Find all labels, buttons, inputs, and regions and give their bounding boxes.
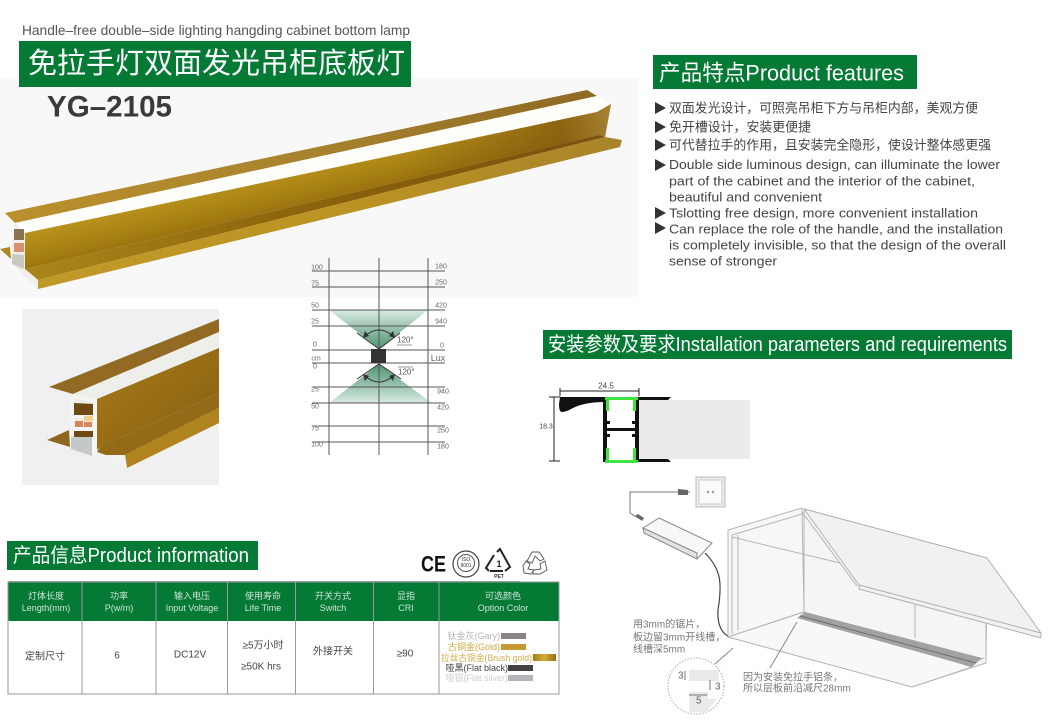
detail circle: 3 (715, 682, 721, 692)
end section (70, 394, 97, 458)
right scale: 420 (437, 404, 449, 412)
diffuser (73, 332, 219, 399)
right scale: 940 (437, 388, 449, 396)
text block: features list: 可代替拉手的作用，且安装完全隐形，使设计整体感更强 (669, 138, 991, 152)
left scale: 50 (311, 404, 319, 410)
color options: 哑银(Flat silver) (446, 672, 508, 683)
lamp end section (0, 223, 38, 289)
color options: 古铜金(Gold) (448, 641, 500, 652)
column headers: 输入电压 (174, 590, 210, 601)
left scale: 25 (311, 386, 319, 394)
lamp main face (25, 104, 611, 269)
dimension labels: 24.5 (598, 382, 614, 390)
lamp lower tray (25, 135, 605, 280)
column headers: 可选颜色 (485, 590, 521, 601)
column headers: Input Voltage (166, 603, 218, 613)
bullets (655, 102, 666, 234)
table header background (8, 582, 559, 621)
table values: ≥5万小时 (242, 640, 284, 652)
title banner (19, 41, 411, 87)
column headers: CRI (398, 603, 414, 613)
left scale (311, 264, 323, 448)
right scale: Lux (431, 353, 446, 363)
column headers: Life Time (245, 603, 281, 613)
text block: features list: 免开槽设计，安装更便捷 (669, 120, 811, 134)
note: saw blade slot: 线槽深5mm (633, 642, 685, 656)
wall socket (696, 477, 725, 507)
table values: ≥50K hrs (241, 662, 281, 672)
title banner: 免拉手灯双面发光吊柜底板灯 (28, 47, 405, 80)
note: saw blade slot: 用3mm的锯片， (633, 618, 705, 630)
text block: features list: beautiful and convenient (669, 190, 822, 204)
tray (97, 393, 219, 455)
aluminium handle strip (797, 612, 982, 667)
column headers: 显指 (397, 590, 415, 601)
table values: DC12V (174, 650, 206, 660)
right scale: 180 (437, 444, 449, 450)
table values: 6 (114, 650, 120, 662)
face (97, 348, 219, 450)
color options: 哑黑(Flat black) (445, 663, 508, 673)
cabinet body (728, 508, 987, 687)
lip (125, 408, 219, 468)
dimension labels (539, 382, 614, 430)
note: shelf reduction: 因为安装免拉手铝条， (743, 670, 843, 684)
angle labels: 120° (398, 368, 415, 376)
left scale: 50 (311, 302, 319, 310)
detail circle (668, 658, 724, 714)
green diffusers (605, 397, 638, 463)
text block: features list: part of the cabinet and the interior of the cabinet, (669, 174, 975, 188)
heading: installation parameters: 安装参数及要求Installation parameters and requirements (548, 333, 1007, 356)
column headers: Length(mm) (22, 603, 70, 613)
column headers: P(w/m) (105, 603, 133, 613)
text block: features list: sense of stronger (669, 254, 778, 268)
model number: YG–2105 (47, 90, 172, 124)
table values (25, 640, 414, 672)
detail circle: 5 (696, 696, 702, 706)
right scale: 180 (435, 264, 447, 270)
panel: product detail photo (22, 309, 219, 485)
note: shelf reduction (743, 670, 851, 694)
left scale: 75 (311, 280, 319, 288)
right scale: 0 (440, 342, 444, 350)
table values: 定制尺寸 (25, 650, 65, 662)
lamp symbol (371, 349, 386, 363)
icon: PET recycling triangle: PET (494, 574, 504, 580)
diagram: cabinet installation (630, 477, 1041, 714)
table values: ≥90 (397, 648, 414, 660)
left scale: 0 (313, 364, 317, 370)
right scale: 940 (435, 318, 447, 326)
table grid (8, 582, 559, 694)
heading: product features: 产品特点Product features (659, 60, 904, 86)
right scale (431, 264, 449, 450)
text block: features list: Double side luminous design, can illuminate the lower (669, 157, 1001, 172)
dimension labels: 18.3 (539, 424, 553, 430)
column headers: 灯体长度 (28, 590, 64, 601)
icon: ISO certification (453, 551, 479, 577)
icon: CE mark: CE (421, 552, 446, 576)
diagram: profile cross-section (539, 382, 750, 463)
lamp lip (38, 137, 622, 289)
driver box (643, 518, 712, 559)
left scale: cm (311, 356, 321, 362)
cabinet door (802, 509, 1041, 638)
subtitle: Handle–free double–side lighting hangding cabinet bottom lamp (22, 22, 410, 38)
column headers: Switch (320, 603, 346, 613)
lamp top strip (5, 90, 597, 223)
text block: features list: is completely invisible, so that the design of the overall (669, 238, 1006, 252)
icon: ISO certification: 9001 (460, 563, 472, 569)
right scale: 250 (437, 428, 449, 434)
left scale: 25 (311, 318, 319, 326)
angle labels (397, 336, 415, 376)
top flange (49, 319, 219, 394)
text block: features list: 双面发光设计，可照亮吊柜下方与吊柜内部，美观方便 (669, 100, 978, 116)
left scale: 75 (311, 426, 319, 432)
LED chips (75, 416, 93, 427)
right scale: 420 (435, 302, 447, 310)
column headers (22, 590, 528, 613)
annotation arrow (715, 622, 797, 668)
note: saw blade slot: 板边留3mm开线槽， (633, 630, 725, 644)
color options: 拉丝古铜金(Brush gold) (441, 652, 532, 663)
icon: PET recycling triangle (486, 549, 510, 580)
light cone lower (329, 364, 432, 403)
table values: 外接开关 (313, 644, 353, 658)
icon: PET recycling triangle: 1 (496, 559, 502, 569)
left wing (47, 430, 70, 447)
left scale: 100 (311, 264, 323, 272)
lamp white diffuser (15, 96, 611, 233)
power cord (630, 492, 690, 520)
chart: lighting distribution (311, 258, 449, 455)
color options (441, 630, 556, 683)
text block: features list: Can replace the role of the handle, and the installation (669, 222, 1003, 236)
color options: 钛金灰(Gary) (448, 630, 500, 641)
right scale: 250 (435, 280, 447, 286)
column headers: 开关方式 (315, 590, 351, 601)
black profile (559, 397, 671, 462)
note: shelf reduction: 所以层板前沿减尺28mm (743, 682, 851, 694)
left scale: 0 (313, 342, 317, 348)
text block: features list: Tslotting free design, more convenient installation (669, 206, 978, 220)
column headers: 使用寿命 (245, 590, 281, 601)
column headers: 功率 (110, 590, 128, 601)
dimension lines (549, 388, 639, 461)
left scale: 100 (311, 442, 323, 448)
column headers: Option Color (478, 603, 528, 613)
icon: ISO certification: ISO (462, 557, 470, 563)
panel: main product photo (0, 78, 638, 297)
icon: recycling symbol (523, 552, 547, 574)
heading: product features (653, 55, 917, 89)
heading: product information: 产品信息Product information (13, 544, 249, 567)
table: product information (8, 582, 559, 694)
text block: features list (655, 100, 1006, 268)
light cone upper (329, 310, 428, 349)
detail circle: 3 (678, 670, 684, 682)
note: saw blade slot (633, 618, 725, 656)
angle labels: 120° (397, 336, 414, 344)
output cable (705, 553, 730, 637)
